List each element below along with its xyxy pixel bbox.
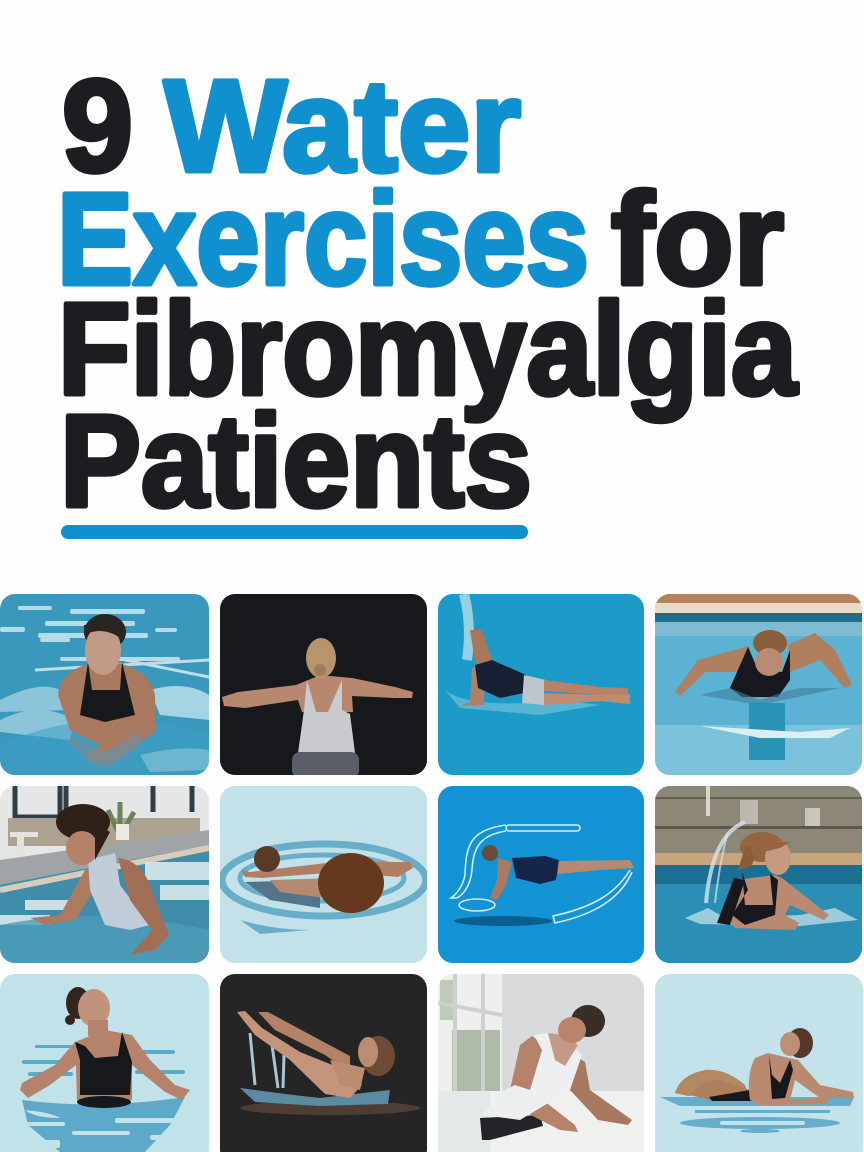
photo tile 2: woman from behind with arms out — [220, 594, 427, 778]
photo tile 9: woman with arms out on pale background — [0, 974, 209, 1152]
photo tile 12: woman reclining on pale water — [655, 974, 863, 1152]
title: Water — [164, 52, 521, 199]
photo tile 7: plank illustration on blue — [438, 786, 644, 963]
photo tile 3: figure in plank over blue water — [438, 594, 644, 775]
photo tile 1: woman in water — [0, 594, 209, 775]
photo tile 6: floating figures on pale water — [220, 786, 427, 963]
title: Patients — [60, 387, 532, 534]
title: Fibromyalgia — [58, 275, 798, 422]
title: for — [611, 165, 784, 312]
title — [57, 52, 798, 534]
photo tile 8: woman in pool with water spray — [655, 786, 862, 963]
title: 9 — [62, 52, 133, 199]
photo tile 11: man leaning on mat in bright room — [438, 974, 644, 1152]
title underline — [61, 525, 528, 539]
photo tile 10: figure reclining with water on dark — [220, 974, 427, 1152]
title: Exercises — [57, 165, 589, 312]
photo tile 4: man swimming in pool — [655, 594, 862, 775]
photo tile 5: man in indoor pool — [0, 786, 209, 963]
